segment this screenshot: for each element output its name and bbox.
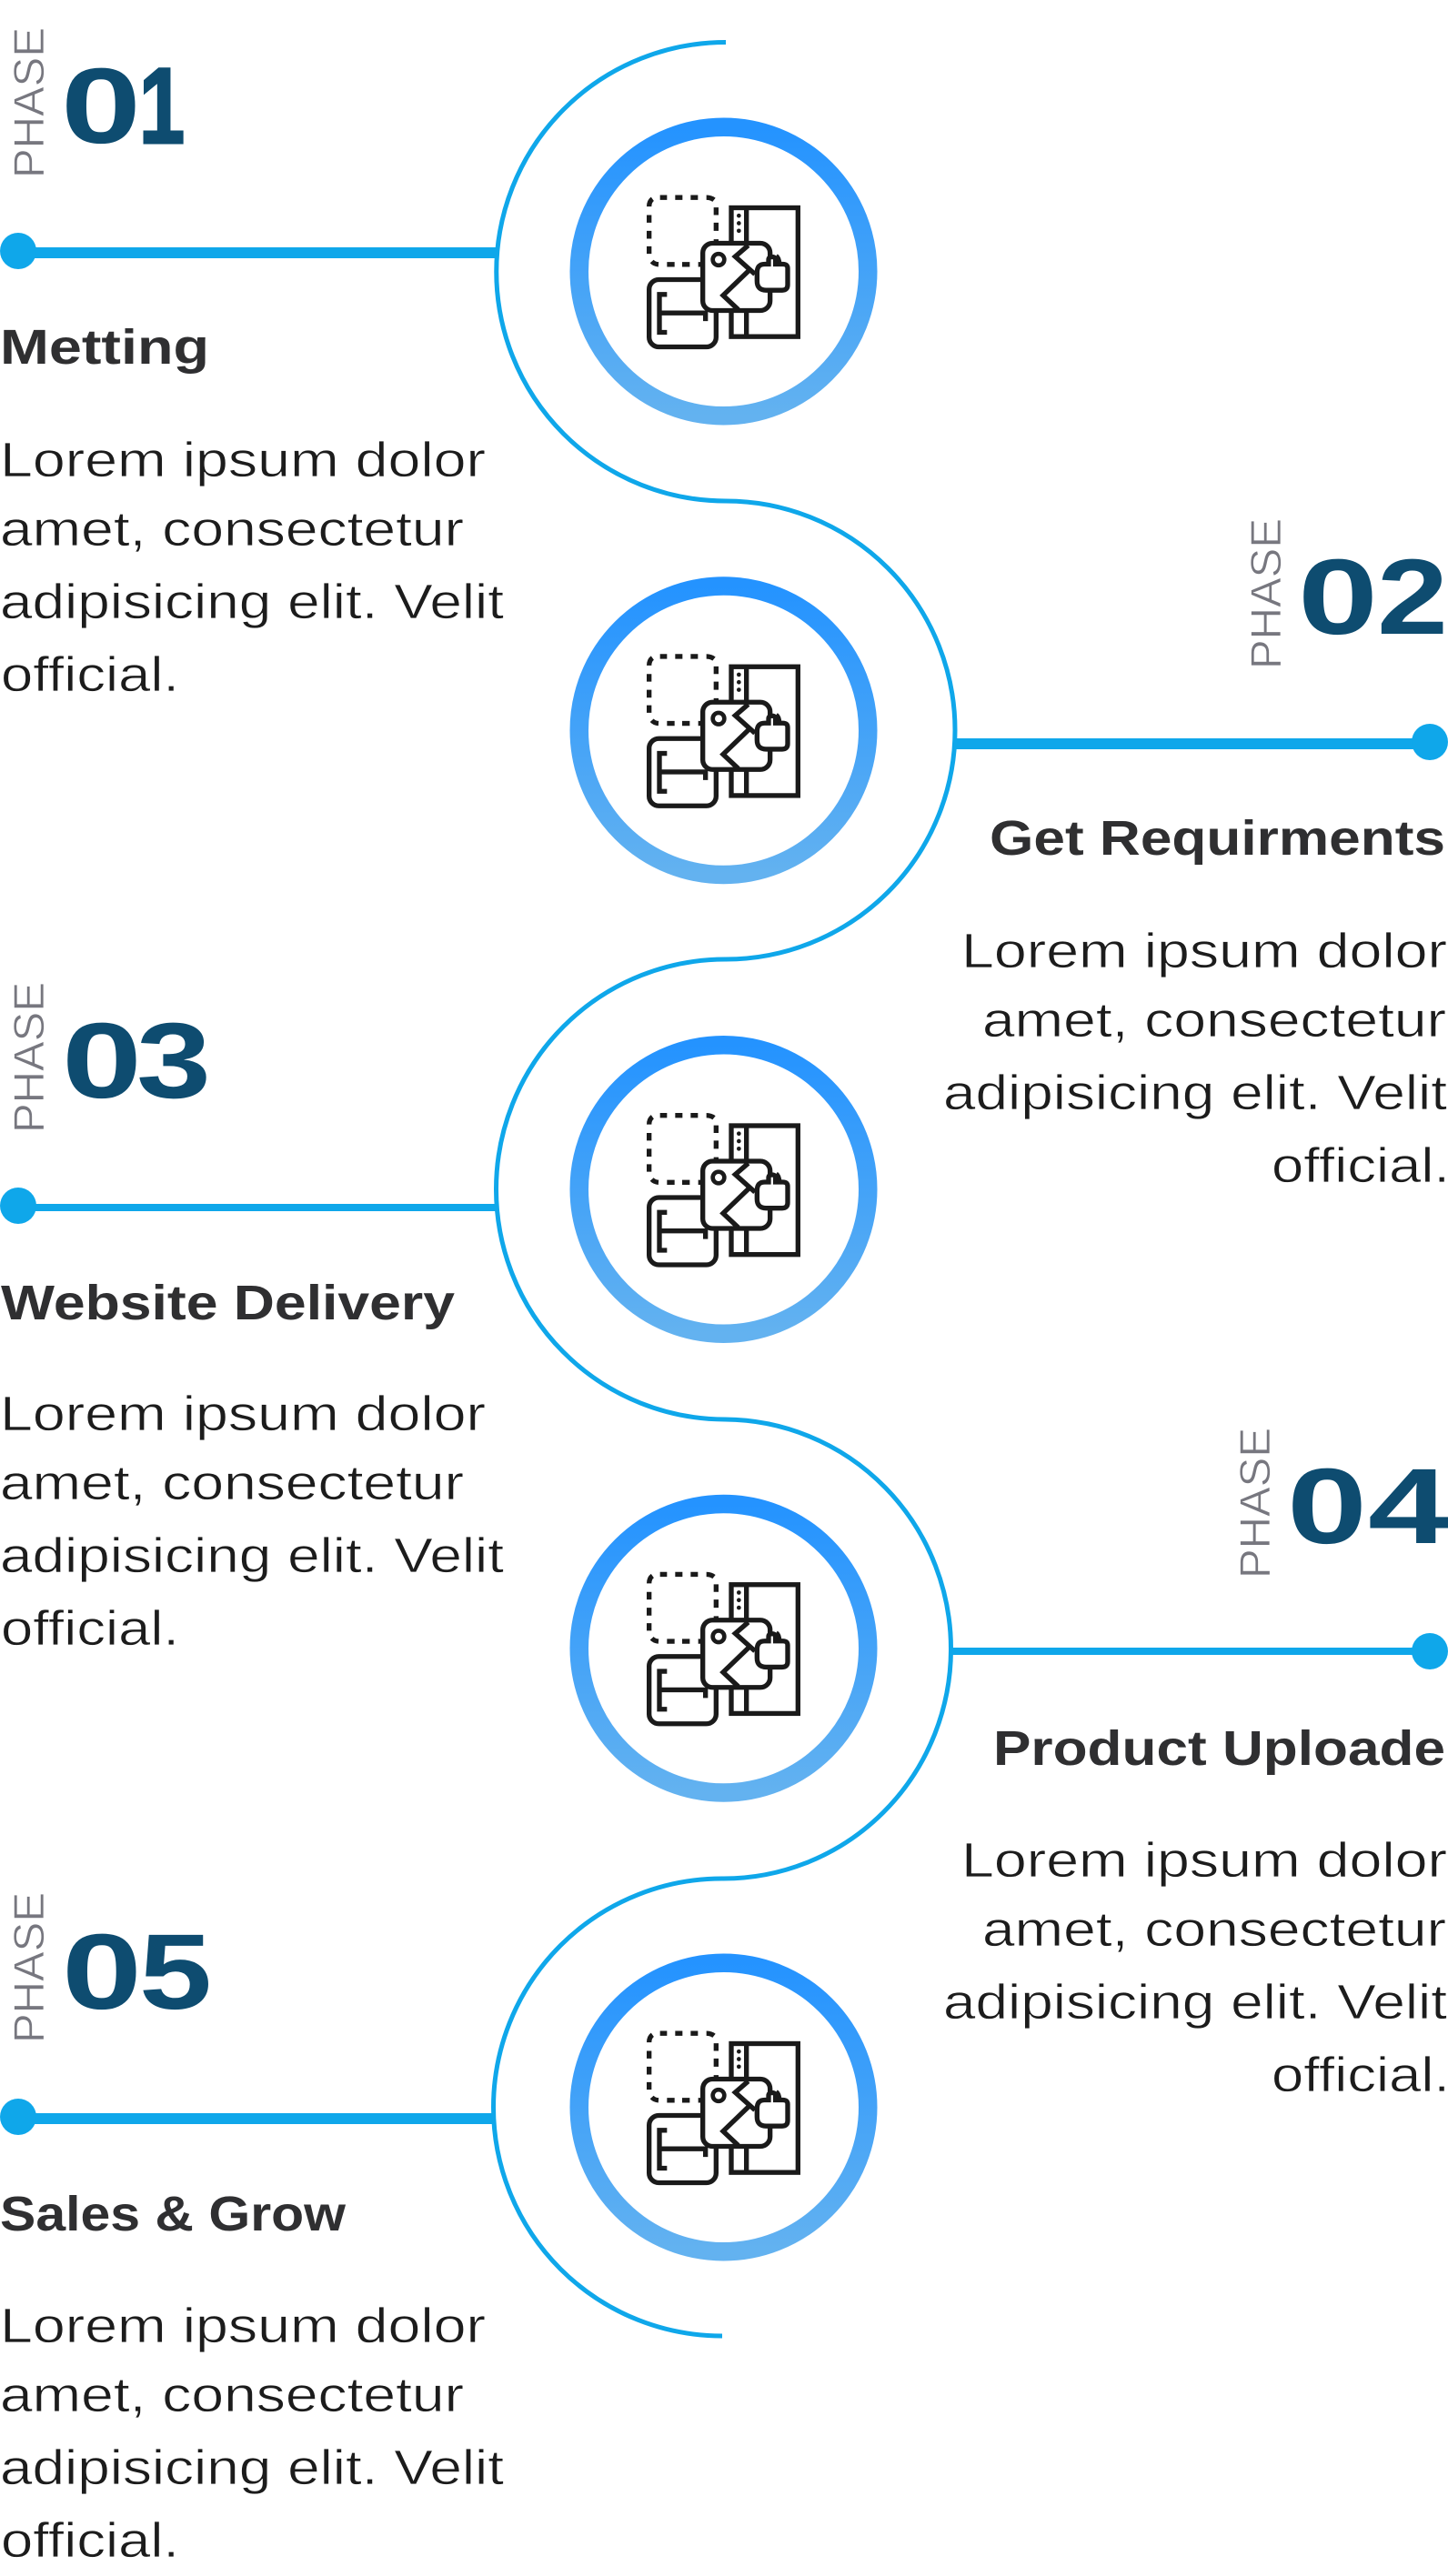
phase 02 number: 2 — [1377, 537, 1448, 657]
gradient ring 2 — [579, 586, 868, 875]
phase 02 number — [1298, 537, 1448, 657]
phase 03 number: 3 — [136, 1001, 211, 1121]
phase 03 body text — [0, 1387, 504, 1656]
phase 04 heading: Product Uploade — [993, 1721, 1445, 1776]
phase 03 number: 0 — [62, 1001, 142, 1121]
phase 04 panel — [943, 1428, 1448, 2102]
phase 03 body text: amet, consectetur — [0, 1456, 464, 1510]
icon: design assets 2 — [649, 657, 798, 806]
phase 02 panel — [943, 518, 1448, 1193]
phase 03 label: PHASE — [5, 982, 53, 1133]
phase 05 connector — [0, 2099, 495, 2135]
phase 04 number — [1287, 1447, 1448, 1567]
phase 05 panel — [0, 1892, 504, 2568]
phase 01 body text: Lorem ipsum dolor — [0, 433, 486, 487]
phase 03 connector — [0, 1188, 498, 1224]
phase 01 body text: official. — [1, 647, 179, 702]
phase 04 label: PHASE — [1231, 1428, 1279, 1579]
phase 01 number: 1 — [139, 46, 185, 166]
phase 01 body text: amet, consectetur — [0, 502, 464, 556]
phase 05 number: 0 — [62, 1912, 142, 2032]
phase 03 body text: official. — [1, 1601, 179, 1656]
phase 01 label: PHASE — [5, 27, 53, 178]
phase 05 label: PHASE — [5, 1892, 53, 2043]
phase 02 body text — [943, 924, 1448, 1193]
icon: design assets 3 — [649, 1116, 798, 1265]
phase 04 body text: Lorem ipsum dolor — [961, 1833, 1447, 1888]
phase 05 body text — [0, 2299, 504, 2568]
icon: design assets 5 — [649, 2033, 798, 2182]
phase 03 body text: adipisicing elit. Velit — [0, 1529, 504, 1583]
phase 02 connector — [955, 724, 1448, 760]
phase 02 label: PHASE — [1242, 518, 1290, 669]
phase 05 body text: amet, consectetur — [0, 2368, 464, 2422]
phase 04 connector — [950, 1633, 1448, 1669]
serpentine timeline path — [493, 42, 955, 2336]
icon: design assets 1 — [649, 197, 798, 346]
phase 05 body text: adipisicing elit. Velit — [0, 2441, 504, 2495]
phase 05 heading: Sales & Grow — [0, 2187, 347, 2241]
phase 04 body text: official. — [1272, 2048, 1448, 2102]
phase 01 panel — [0, 27, 504, 702]
phase 02 body text: adipisicing elit. Velit — [943, 1066, 1447, 1120]
phase 04 body text: amet, consectetur — [982, 1902, 1446, 1957]
phase 05 number — [62, 1912, 212, 2032]
gradient ring 5 — [579, 1963, 868, 2251]
phase 02 body text: Lorem ipsum dolor — [961, 924, 1447, 978]
phase 02 body text: amet, consectetur — [982, 993, 1446, 1047]
phase 04 number: 4 — [1368, 1447, 1448, 1567]
phase 01 body text: adipisicing elit. Velit — [0, 575, 504, 629]
phase 03 heading: Website Delivery — [1, 1276, 455, 1330]
phase 01 number — [61, 46, 185, 166]
phase 02 body text: official. — [1272, 1138, 1448, 1193]
gradient ring 3 — [579, 1045, 868, 1334]
gradient ring 4 — [579, 1504, 868, 1793]
phase 05 number: 5 — [139, 1912, 212, 2032]
phase 02 heading: Get Requirments — [990, 811, 1445, 866]
phase 01 connector — [0, 233, 498, 269]
icon: design assets 4 — [649, 1574, 798, 1724]
phase 03 panel — [0, 982, 504, 1656]
phase 03 body text: Lorem ipsum dolor — [0, 1387, 486, 1441]
phase 05 body text: Lorem ipsum dolor — [0, 2299, 486, 2353]
phase 04 body text: adipisicing elit. Velit — [943, 1975, 1447, 2030]
gradient ring 1 — [579, 127, 868, 416]
phase 01 number: 0 — [61, 46, 141, 166]
phase 02 number: 0 — [1298, 537, 1378, 657]
phase 04 body text — [943, 1833, 1448, 2102]
phase 01 body text — [0, 433, 504, 702]
phase 01 heading: Metting — [0, 320, 209, 375]
phase 04 number: 0 — [1287, 1447, 1367, 1567]
phase 05 body text: official. — [1, 2513, 179, 2568]
phase 03 number — [62, 1001, 211, 1121]
